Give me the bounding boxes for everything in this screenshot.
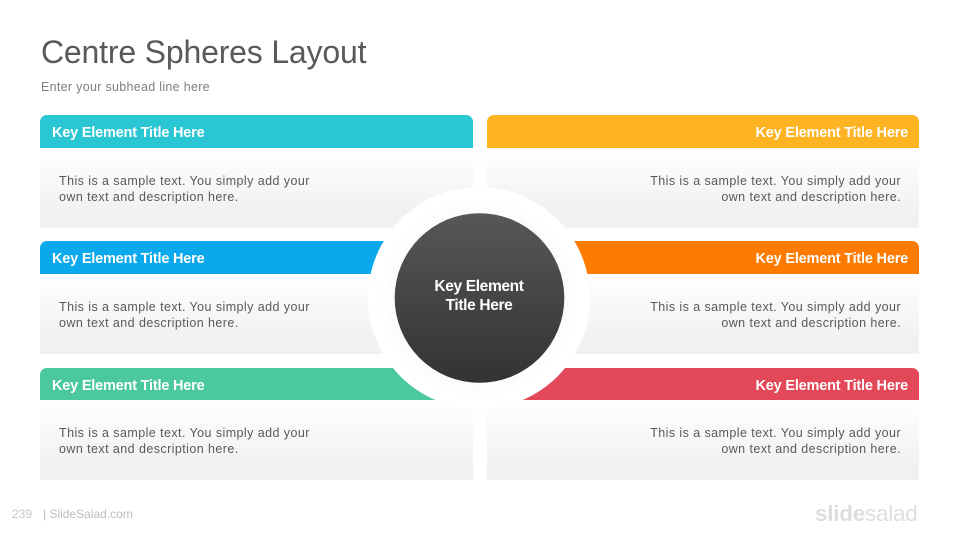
footer source: | SlideSalad.com — [43, 507, 133, 521]
panel 1 body: This is a sample text. You simply add your — [59, 174, 310, 188]
subhead: Enter your subhead line here — [41, 80, 210, 94]
panel 4 header — [487, 241, 919, 274]
centre title — [434, 278, 524, 314]
panel 3 header: Key Element Title Here — [52, 251, 204, 267]
panel 6 body — [487, 400, 919, 480]
panel 6 header: Key Element Title Here — [756, 378, 908, 394]
logo wordmark: slidesalad — [815, 501, 918, 526]
centre title: Title Here — [446, 297, 512, 314]
title: Centre Spheres Layout — [41, 34, 366, 70]
panel 4 header: Key Element Title Here — [756, 251, 908, 267]
panel 6 header — [487, 368, 919, 400]
panel 5 header — [40, 368, 473, 400]
panel 4 body: This is a sample text. You simply add your — [650, 300, 901, 314]
panel 2 body — [487, 148, 919, 228]
panel 1 header — [40, 115, 473, 148]
panel 4 body — [487, 274, 919, 354]
panel 3 header — [40, 241, 473, 274]
panel 3 body — [40, 274, 473, 354]
panel 3 body: own text and description here. — [59, 316, 239, 330]
panel 5 header: Key Element Title Here — [52, 378, 204, 394]
panel 5 body — [40, 400, 473, 480]
panel 6 body: This is a sample text. You simply add your — [650, 426, 901, 440]
panel 1 body — [40, 148, 473, 228]
panel 4 body: own text and description here. — [721, 316, 901, 330]
centre sphere — [369, 188, 589, 400]
centre title: Key Element — [434, 278, 524, 295]
panel 2 header — [487, 115, 919, 148]
panel 2 body: own text and description here. — [721, 190, 901, 204]
panel 1 body: own text and description here. — [59, 190, 239, 204]
panel 2 header: Key Element Title Here — [756, 125, 908, 141]
panel 1 header: Key Element Title Here — [52, 125, 204, 141]
panel 2 body: This is a sample text. You simply add your — [650, 174, 901, 188]
panel 3 body: This is a sample text. You simply add your — [59, 300, 310, 314]
panel 6 body: own text and description here. — [721, 442, 901, 456]
panel 5 body: This is a sample text. You simply add your — [59, 426, 310, 440]
panel 5 body: own text and description here. — [59, 442, 239, 456]
page number: 239 — [12, 507, 32, 521]
